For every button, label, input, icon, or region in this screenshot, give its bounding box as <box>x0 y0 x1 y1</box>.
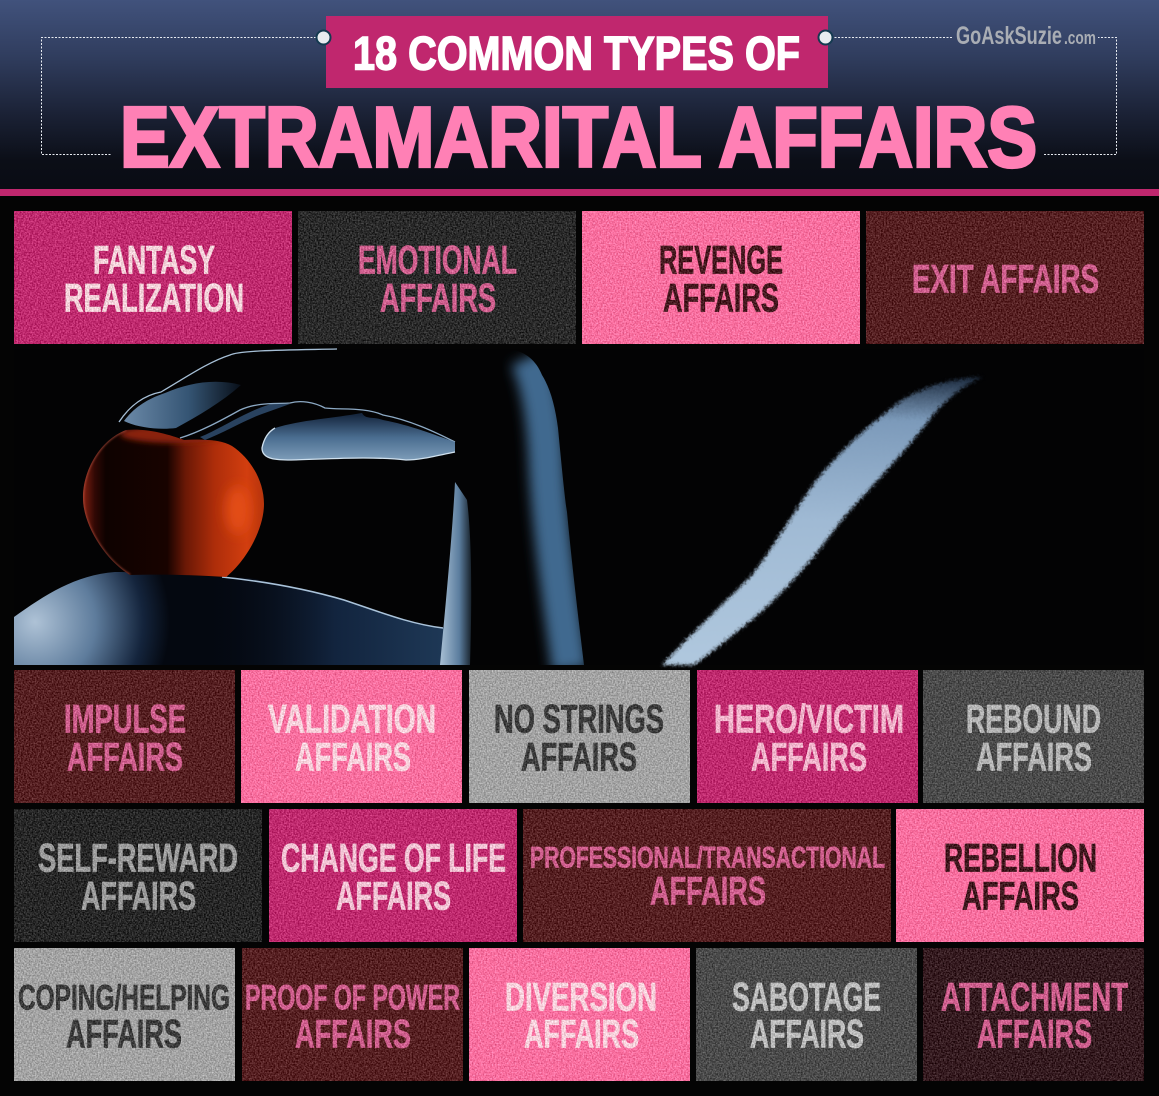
tile: sabotage affairs: AFFAIRS <box>750 1012 864 1056</box>
upper finger <box>119 349 455 442</box>
tile: sabotage affairs <box>696 948 917 1081</box>
tile: professional/transactional affairs: AFFAIRS <box>650 870 766 914</box>
tile: rebound affairs: AFFAIRS <box>976 736 1092 780</box>
tile: impulse affairs: IMPULSE <box>64 698 186 742</box>
header divider bar <box>0 189 1159 196</box>
tile: proof of power affairs <box>242 948 463 1081</box>
left connector dot <box>316 30 330 44</box>
tile: hero/victim affairs: AFFAIRS <box>751 736 867 780</box>
tile: no strings affairs <box>469 670 690 803</box>
tile: change of life affairs: CHANGE OF LIFE <box>281 836 506 880</box>
forearm <box>440 358 570 670</box>
tile: professional/transactional affairs: PROFESSIONAL/TRANSACTIONAL <box>530 842 885 874</box>
tile: emotional affairs: EMOTIONAL <box>358 238 517 282</box>
tile: coping/helping affairs <box>14 948 235 1081</box>
right connector dot <box>818 30 832 44</box>
tile: diversion affairs: AFFAIRS <box>524 1012 639 1056</box>
tile: fantasy realization <box>14 211 292 344</box>
watermark: .com <box>1064 28 1096 48</box>
tile: rebellion affairs: AFFAIRS <box>962 874 1079 918</box>
watermark: GoAskSuzie <box>956 22 1062 50</box>
thumb <box>262 413 455 460</box>
tile: coping/helping affairs: AFFAIRS <box>66 1012 182 1056</box>
tile: no strings affairs: AFFAIRS <box>521 736 637 780</box>
lower body shoulder <box>14 572 444 665</box>
main title: EXTRAMARITAL AFFAIRS <box>120 90 1037 186</box>
tile: self-reward affairs: SELF-REWARD <box>38 836 238 880</box>
tile: change of life affairs: AFFAIRS <box>336 874 451 918</box>
tile: professional/transactional affairs <box>523 809 891 942</box>
tile: validation affairs <box>241 670 462 803</box>
tile: revenge affairs: AFFAIRS <box>663 276 779 320</box>
tile: rebellion affairs <box>896 809 1144 942</box>
tile: self-reward affairs: AFFAIRS <box>81 874 196 918</box>
tile: coping/helping affairs: COPING/HELPING <box>18 978 230 1018</box>
apple <box>83 425 264 577</box>
tile: attachment affairs <box>923 948 1144 1081</box>
tile: exit affairs <box>866 211 1144 344</box>
tile: emotional affairs <box>298 211 576 344</box>
tile: revenge affairs <box>582 211 860 344</box>
tile: hero/victim affairs: HERO/VICTIM <box>714 698 904 742</box>
tile: change of life affairs <box>269 809 517 942</box>
subtitle box <box>326 16 828 88</box>
tile: rebound affairs <box>923 670 1144 803</box>
tile: sabotage affairs: SABOTAGE <box>732 976 881 1020</box>
tile: diversion affairs <box>469 948 690 1081</box>
tile: validation affairs: VALIDATION <box>268 698 436 742</box>
tile: proof of power affairs: AFFAIRS <box>295 1012 411 1056</box>
tile: proof of power affairs: PROOF OF POWER <box>245 978 460 1018</box>
tile: fantasy realization: REALIZATION <box>64 276 244 320</box>
tile: no strings affairs: NO STRINGS <box>494 698 664 742</box>
tile: self-reward affairs <box>14 809 262 942</box>
tile: diversion affairs: DIVERSION <box>505 976 657 1020</box>
tile: revenge affairs: REVENGE <box>659 238 783 282</box>
photo: hand and apple silhouette <box>14 348 982 668</box>
tile: hero/victim affairs <box>697 670 918 803</box>
dashed frame <box>42 38 1116 154</box>
tile: impulse affairs: AFFAIRS <box>67 736 183 780</box>
tile: validation affairs: AFFAIRS <box>295 736 411 780</box>
tile: fantasy realization: FANTASY <box>93 238 215 282</box>
header banner <box>0 0 1159 189</box>
subtitle box: 18 COMMON TYPES OF <box>353 26 800 80</box>
tile: emotional affairs: AFFAIRS <box>380 276 496 320</box>
tile: impulse affairs <box>14 670 235 803</box>
tile: attachment affairs: AFFAIRS <box>977 1012 1092 1056</box>
back curve highlight <box>662 377 983 665</box>
